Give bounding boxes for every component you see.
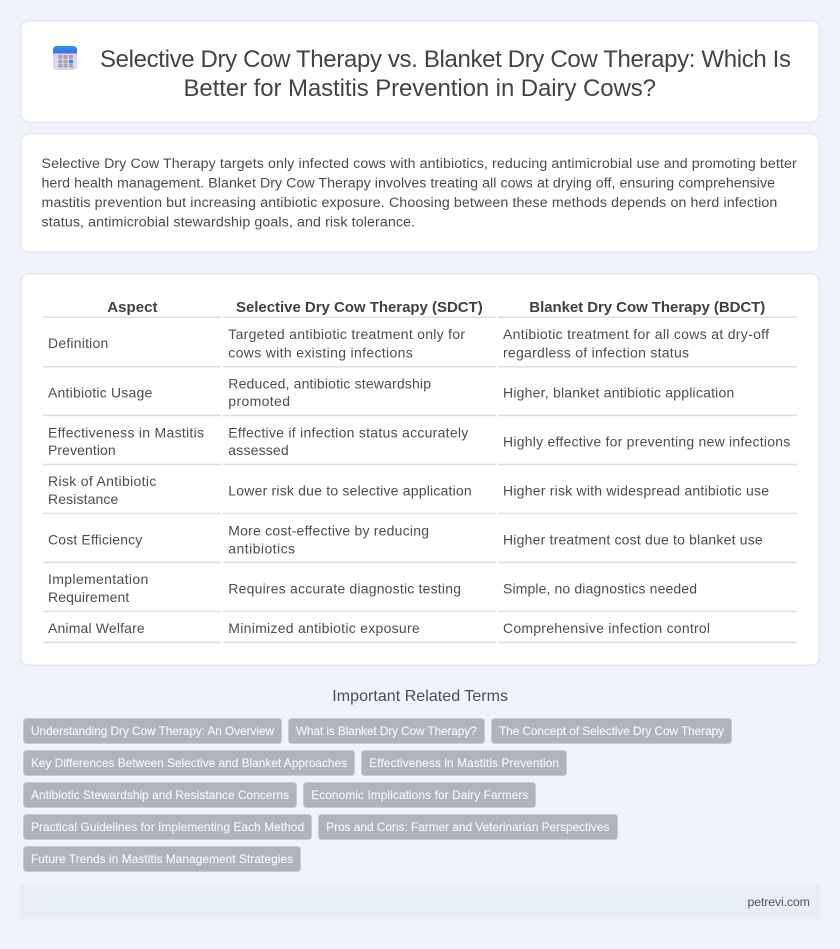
tag <box>24 718 282 744</box>
table row: Animal Welfare: Comprehensive infection control <box>503 620 710 636</box>
table row: Animal Welfare <box>43 620 797 643</box>
table row: Definition: cows with existing infections <box>228 344 413 360</box>
table row: Antibiotic Usage: promoted <box>228 393 290 409</box>
table header row: Aspect <box>107 299 158 316</box>
table row: Definition: Definition <box>48 335 108 351</box>
table header row: Blanket Dry Cow Therapy (BDCT) <box>529 299 765 316</box>
tag <box>318 814 618 840</box>
tag: Understanding Dry Cow Therapy: An Overview <box>31 724 274 738</box>
table row: Risk of Antibiotic Resistance: Higher risk with widespread antibiotic use <box>503 482 769 498</box>
table row: Antibiotic Usage: Higher, blanket antibiotic application <box>503 384 734 400</box>
table row: Cost Efficiency: Cost Efficiency <box>48 531 142 547</box>
tag: What is Blanket Dry Cow Therapy? <box>296 724 477 738</box>
related terms tags <box>24 718 732 872</box>
table row: Definition: Targeted antibiotic treatment only for <box>228 326 465 342</box>
summary text: Selective Dry Cow Therapy targets only infected cows with antibiotics, reducing antimicrobial use and promoting better <box>42 156 797 172</box>
table row: Implementation Requirement: Requires accurate diagnostic testing <box>228 580 461 596</box>
tag <box>304 782 536 808</box>
tag: Antibiotic Stewardship and Resistance Concerns <box>31 788 289 802</box>
table row: Implementation Requirement: Simple, no diagnostics needed <box>503 580 697 596</box>
tag <box>24 846 300 872</box>
title: Better for Mastitis Prevention in Dairy Cows? <box>184 75 656 102</box>
tag: Economic Implications for Dairy Farmers <box>311 788 528 802</box>
table row: Antibiotic Usage <box>43 375 797 416</box>
table row: Definition: regardless of infection status <box>503 344 689 360</box>
table row: Antibiotic Usage: Reduced, antibiotic stewardship <box>228 375 431 391</box>
table row: Risk of Antibiotic Resistance <box>43 473 797 514</box>
footer bar <box>20 885 820 919</box>
table row: Effectiveness in Mastitis Prevention: Effectiveness in Mastitis <box>48 424 204 440</box>
table row: Risk of Antibiotic Resistance: Resistance <box>48 491 119 507</box>
table row: Risk of Antibiotic Resistance: Lower risk due to selective application <box>228 482 472 498</box>
tag <box>24 750 354 776</box>
tag: Pros and Cons: Farmer and Veterinarian Perspectives <box>326 820 609 834</box>
table row: Definition: Antibiotic treatment for all cows at dry-off <box>503 326 769 342</box>
summary text: status, antimicrobial stewardship goals, and risk tolerance. <box>42 214 415 230</box>
table row: Effectiveness in Mastitis Prevention: assessed <box>228 442 289 458</box>
table row: Animal Welfare: Animal Welfare <box>48 620 145 636</box>
table row: Animal Welfare: Minimized antibiotic exposure <box>228 620 420 636</box>
tag: Effectiveness in Mastitis Prevention <box>369 756 559 770</box>
table row: Cost Efficiency <box>43 522 797 563</box>
table row: Cost Efficiency: Higher treatment cost due to blanket use <box>503 531 763 547</box>
summary text <box>42 156 797 230</box>
table row: Cost Efficiency: antibiotics <box>228 540 295 556</box>
table row: Effectiveness in Mastitis Prevention: Effective if infection status accurately <box>228 424 468 440</box>
icon: calendar <box>53 46 77 70</box>
heading: important related terms: Important Related Terms <box>332 688 508 705</box>
table header row <box>43 299 797 318</box>
tag <box>288 718 484 744</box>
table row: Definition <box>43 326 797 368</box>
panel: title header <box>21 21 819 122</box>
tag <box>24 814 312 840</box>
panel: summary paragraph <box>21 134 819 252</box>
title <box>100 46 791 102</box>
tag: Future Trends in Mastitis Management Strategies <box>31 852 293 866</box>
summary text: herd health management. Blanket Dry Cow Therapy involves treating all cows at drying off, ensuring comprehensive <box>42 176 775 192</box>
table row: Implementation Requirement: Requirement <box>48 589 129 605</box>
table header row: Selective Dry Cow Therapy (SDCT) <box>236 299 483 316</box>
tag: Key Differences Between Selective and Blanket Approaches <box>31 756 347 770</box>
tag <box>492 718 732 744</box>
table row: Effectiveness in Mastitis Prevention: Prevention <box>48 442 116 458</box>
title: Selective Dry Cow Therapy vs. Blanket Dry Cow Therapy: Which Is <box>100 46 791 73</box>
table row: Effectiveness in Mastitis Prevention: Highly effective for preventing new infections <box>503 434 790 450</box>
table row: Implementation Requirement <box>43 571 797 612</box>
tag <box>24 782 296 808</box>
tag: Practical Guidelines for Implementing Each Method <box>31 820 304 834</box>
table row: Risk of Antibiotic Resistance: Risk of Antibiotic <box>48 473 156 489</box>
summary text: mastitis prevention but increasing antibiotic exposure. Choosing between these methods depends on herd infection <box>42 195 777 211</box>
table row: Antibiotic Usage: Antibiotic Usage <box>48 384 153 400</box>
tag <box>362 750 566 776</box>
footer source: petrevi.com <box>748 895 810 909</box>
tag: The Concept of Selective Dry Cow Therapy <box>499 724 724 738</box>
table row: Implementation Requirement: Implementation <box>48 571 148 587</box>
table row: Effectiveness in Mastitis Prevention <box>43 424 797 465</box>
table row: Cost Efficiency: More cost-effective by reducing <box>228 522 429 538</box>
panel: comparison table <box>21 274 819 665</box>
